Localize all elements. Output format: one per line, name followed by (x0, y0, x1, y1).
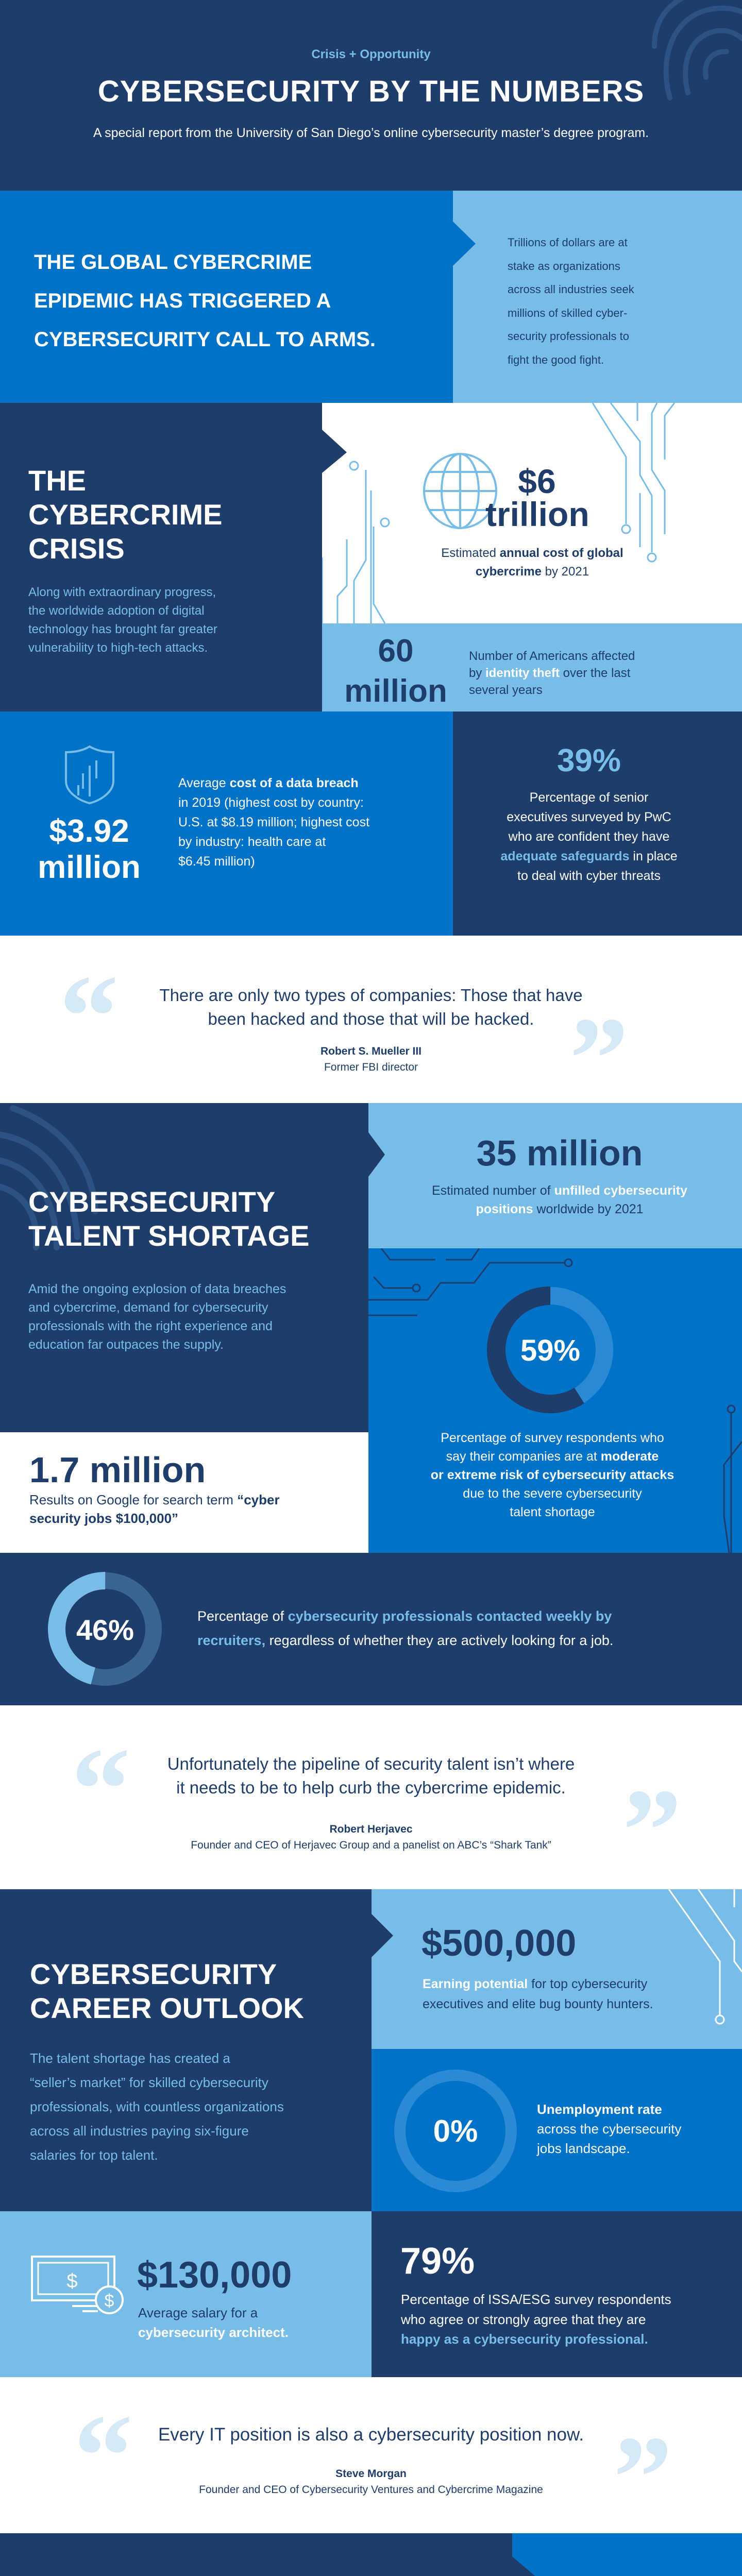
text: in 2019 (highest cost by country: (178, 795, 364, 810)
chart: 59% donut (487, 1286, 613, 1413)
caption: Estimated number of unfilled cybersecurity (432, 1183, 687, 1198)
text: to deal with cyber threats (517, 869, 661, 883)
caption: Percentage of ISSA/ESG survey respondents (401, 2292, 671, 2307)
panel: 60 million (322, 623, 742, 711)
caption: say their companies are at moderate (446, 1449, 659, 1464)
text: across the cybersecurity (537, 2121, 681, 2137)
heading: CYBERSECURITY (28, 1185, 275, 1218)
caption: positions worldwide by 2021 (476, 1202, 644, 1216)
stat: $6 trillion (485, 462, 589, 533)
heading: CYBERCRIME (28, 498, 222, 531)
stat: $6 trillion: $6 (518, 462, 556, 500)
intro text: millions of skilled cyber- (508, 306, 627, 319)
intro text (508, 236, 634, 366)
text: adequate safeguards in place (500, 849, 678, 863)
body text: The talent shortage has created a (30, 2050, 230, 2066)
navy box (0, 2533, 512, 2576)
body text (28, 585, 217, 655)
attribution: Founder and CEO of Herjavec Group and a panelist on ABC’s “Shark Tank” (191, 1839, 551, 1851)
text: by identity theft over the last (469, 666, 630, 680)
body text: professionals with the right experience and (28, 1319, 273, 1333)
heading: THE (28, 464, 86, 497)
quote text: Unfortunately the pipeline of security talent isn’t where (167, 1754, 575, 1773)
stat: 79% (400, 2241, 475, 2282)
headline: CYBERSECURITY CALL TO ARMS. (34, 328, 376, 351)
caption: security jobs $100,000” (29, 1511, 178, 1526)
text: Average cost of a data breach (178, 776, 359, 790)
light panel (368, 1103, 742, 1248)
quote text: Every IT position is also a cybersecurity position now. (158, 2425, 584, 2445)
heading: CAREER OUTLOOK (30, 1992, 304, 2024)
caption (432, 1183, 687, 1216)
panel: 79% (372, 2211, 742, 2377)
circuit lines (322, 403, 675, 623)
stat: 35 million: 35 million (477, 1133, 643, 1173)
body text: across all industries paying six-figure (30, 2123, 249, 2139)
panel: talent shortage (0, 1103, 742, 1553)
arrow (368, 1132, 385, 1177)
text (537, 2099, 681, 2158)
subtitle: A special report from the University of San Diego’s online cybersecurity master’s degree program. (93, 126, 649, 140)
panel: 39% (453, 711, 742, 936)
quote text: been hacked and those that will be hacked. (208, 1009, 534, 1028)
caption (431, 1431, 674, 1519)
body text: Amid the ongoing explosion of data breaches (28, 1282, 286, 1296)
attribution: Robert S. Mueller III (321, 1045, 421, 1057)
text: recruiters, regardless of whether they are actively looking for a job. (197, 1633, 613, 1648)
body text: technology has brought far greater (28, 622, 217, 636)
chart: 59% donut: 59% (520, 1334, 580, 1367)
intro text: across all industries seek (508, 283, 634, 296)
heading: CYBERSECURITY (30, 1958, 277, 1990)
text: Unemployment rate (537, 2102, 662, 2117)
attribution (0, 2466, 742, 2498)
arrow (512, 2556, 539, 2576)
intro text: Trillions of dollars are at (508, 236, 628, 249)
text: Percentage of senior (530, 790, 648, 805)
fingerprint decoration (652, 0, 742, 100)
panel: career outlook (0, 1889, 742, 2377)
stat: 39% (557, 743, 621, 778)
text: by industry: health care at (178, 835, 326, 849)
text: $6.45 million) (178, 854, 255, 869)
body text: “seller’s market” for skilled cybersecurity (30, 2075, 268, 2090)
caption (401, 2290, 671, 2349)
stat: $500,000: $500,000 (421, 1923, 576, 1964)
caption: cybersecurity architect. (138, 2325, 289, 2340)
panel: cybercrime crisis (0, 403, 742, 711)
chart: ring: 0% (433, 2114, 478, 2148)
caption: who agree or strongly agree that they are (401, 2311, 646, 2327)
caption: due to the severe cybersecurity (463, 1486, 642, 1501)
chart: ring (394, 2069, 517, 2193)
quote: Herjavec (71, 1730, 682, 1854)
text (469, 649, 635, 697)
stat: $6 trillion: trillion (485, 495, 589, 533)
body text: the worldwide adoption of digital (28, 604, 205, 618)
caption: executives and elite bug bounty hunters. (423, 1997, 653, 2011)
caption (138, 2303, 289, 2342)
attribution (321, 1045, 421, 1073)
arrow (322, 430, 347, 473)
caption (441, 546, 623, 579)
headline: THE GLOBAL CYBERCRIME (34, 251, 312, 274)
chart: 46% donut: 46% (76, 1614, 134, 1646)
stat: 60 (378, 633, 413, 669)
chart: 46% donut (48, 1572, 162, 1686)
title: CYBERSECURITY BY THE NUMBERS (98, 75, 644, 108)
text: Percentage of cybersecurity professionals contacted weekly by (197, 1608, 612, 1624)
quote text: There are only two types of companies: Those that have (159, 986, 583, 1005)
stat: $130,000 (137, 2255, 292, 2296)
headline: EPIDEMIC HAS TRIGGERED A (34, 290, 331, 312)
fingerprint decoration (0, 1105, 98, 1250)
intro text: stake as organizations (508, 260, 620, 272)
body text: salaries for top talent. (30, 2147, 158, 2163)
panel: 0% (372, 2049, 742, 2211)
circuit lines (368, 1248, 742, 1553)
panel: $130,000 (0, 2211, 372, 2377)
icon: shield (65, 745, 114, 804)
caption: happy as a cybersecurity professional. (401, 2331, 648, 2347)
icon: money: $ (105, 2291, 114, 2311)
caption: Estimated annual cost of global (441, 546, 623, 560)
caption: or extreme risk of cybersecurity attacks (431, 1468, 674, 1482)
panel: education (0, 2533, 742, 2576)
intro text: fight the good fight. (508, 353, 604, 366)
panel: 46% (0, 1553, 742, 1705)
stat: million (344, 673, 447, 709)
circuit lines (668, 1889, 742, 2025)
text (178, 776, 369, 869)
header panel (0, 0, 742, 191)
quote text (159, 986, 583, 1028)
intro panel (0, 191, 742, 403)
text: executives surveyed by PwC (507, 810, 671, 824)
attribution: Founder and CEO of Cybersecurity Ventures and Cybercrime Magazine (199, 2484, 543, 2496)
quote: Mueller (59, 957, 629, 1082)
body text: education far outpaces the supply. (28, 1337, 224, 1352)
attribution: Steve Morgan (335, 2468, 407, 2480)
heading: TALENT SHORTAGE (28, 1219, 309, 1252)
navy left (0, 1103, 368, 1432)
body text: Along with extraordinary progress, (28, 585, 216, 599)
stat (344, 633, 447, 709)
caption: Earning potential for top cybersecurity (423, 1977, 647, 1991)
panel: data breach (0, 711, 453, 936)
stat: 1.7 million: 1.7 million (29, 1450, 206, 1490)
light panel (453, 191, 742, 403)
text: several years (469, 683, 543, 697)
navy left (0, 1889, 372, 2211)
attribution: Former FBI director (324, 1061, 418, 1073)
text: U.S. at $8.19 million; highest cost (178, 815, 369, 829)
attribution (191, 1823, 551, 1851)
body text: vulnerability to high-tech attacks. (28, 641, 208, 655)
caption: Percentage of survey respondents who (441, 1431, 664, 1445)
heading (28, 464, 222, 565)
quote: Morgan (0, 2377, 742, 2533)
body text: professionals, with countless organizations (30, 2099, 284, 2114)
text (500, 790, 678, 883)
blue right column (512, 2533, 742, 2576)
blue panel (368, 1248, 742, 1553)
body text: and cybercrime, demand for cybersecurity (28, 1300, 268, 1315)
icon: money (31, 2256, 126, 2316)
text: jobs landscape. (537, 2141, 630, 2156)
quote text: it needs to be to help curb the cybercrime epidemic. (176, 1778, 566, 1797)
stat: $3.92 (49, 814, 129, 849)
body text (30, 2050, 284, 2163)
kicker: Crisis + Opportunity (311, 47, 431, 61)
arrow (372, 1914, 393, 1957)
heading (28, 1185, 309, 1252)
intro text: security professionals to (508, 330, 629, 343)
text: who are confident they have (509, 829, 669, 844)
caption: cybercrime by 2021 (476, 565, 589, 579)
caption: Results on Google for search term “cyber (29, 1492, 280, 1507)
heading: CRISIS (28, 532, 125, 565)
caption: talent shortage (510, 1505, 595, 1519)
stat: million (38, 850, 141, 885)
text: Number of Americans affected (469, 649, 635, 663)
stat (38, 814, 141, 885)
caption: Average salary for a (138, 2305, 258, 2320)
quote text (167, 1754, 575, 1797)
light top right (372, 1889, 742, 2049)
text (197, 1608, 613, 1648)
caption (29, 1492, 280, 1526)
caption (423, 1974, 653, 2014)
body text (28, 1282, 286, 1352)
arrow (453, 222, 476, 266)
icon: money: $ (66, 2270, 78, 2292)
heading (30, 1958, 304, 2024)
headline (34, 251, 376, 351)
attribution: Robert Herjavec (329, 1823, 413, 1835)
navy left (0, 403, 322, 711)
icon: globe (423, 453, 497, 529)
